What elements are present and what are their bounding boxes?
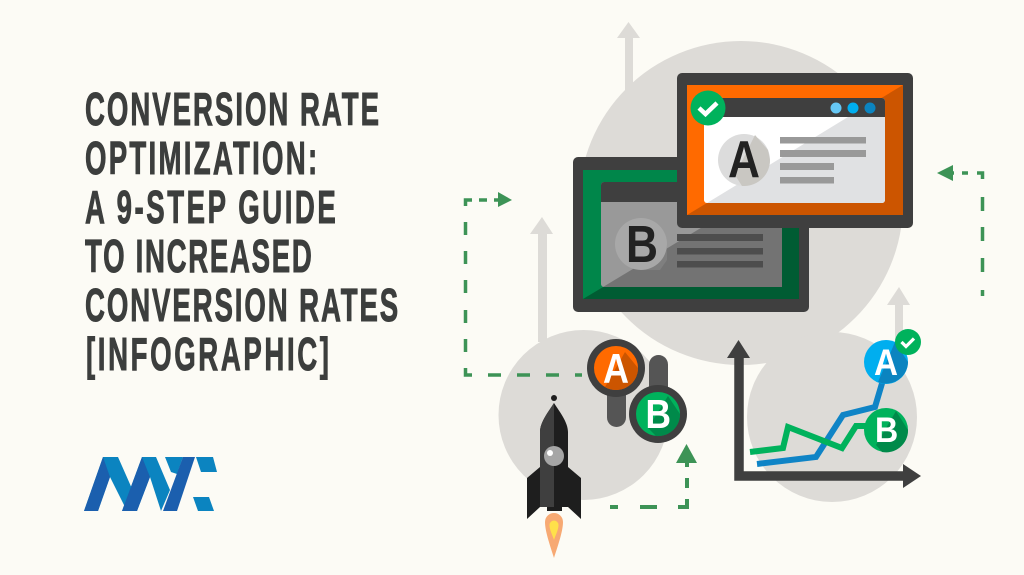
arrow: right grey (887, 287, 910, 340)
title: OPTIMIZATION: (85, 134, 317, 185)
title: [INFOGRAPHIC] (86, 330, 329, 381)
badge A blue: A (874, 342, 898, 383)
badge A blue (864, 340, 908, 384)
badge B green (864, 408, 908, 452)
title: CONVERSION RATES (85, 281, 398, 332)
badge B: B (646, 391, 671, 437)
background circle behind chart (747, 332, 917, 502)
badge A: A (603, 345, 629, 392)
large background circle (579, 41, 903, 365)
icon: green check badge (690, 90, 726, 126)
badge check (895, 329, 921, 355)
chart axes (739, 358, 903, 476)
window A: A (728, 131, 760, 189)
line chart (727, 329, 921, 488)
badge B green: B (875, 411, 898, 450)
green series (750, 426, 877, 452)
A/B toggle badges (587, 339, 687, 443)
dashed arrow: right loop (937, 165, 982, 296)
logo (84, 457, 217, 511)
background circle behind rocket (498, 330, 668, 500)
title: A 9-STEP GUIDE (85, 183, 336, 234)
title: CONVERSION RATE (85, 85, 379, 136)
arrow: top grey (617, 22, 640, 90)
title (85, 85, 398, 381)
dashed arrow: bottom (610, 444, 697, 507)
window controls (830, 102, 876, 114)
rocket flame (545, 513, 563, 558)
blue series (757, 380, 883, 464)
window B: B (626, 216, 658, 274)
arrow: left grey (530, 217, 553, 342)
title: TO INCREASED (85, 232, 312, 283)
window B (573, 157, 809, 312)
icon: rocket (527, 395, 581, 558)
dashed arrow: left loop (466, 192, 582, 375)
window A (677, 73, 913, 228)
